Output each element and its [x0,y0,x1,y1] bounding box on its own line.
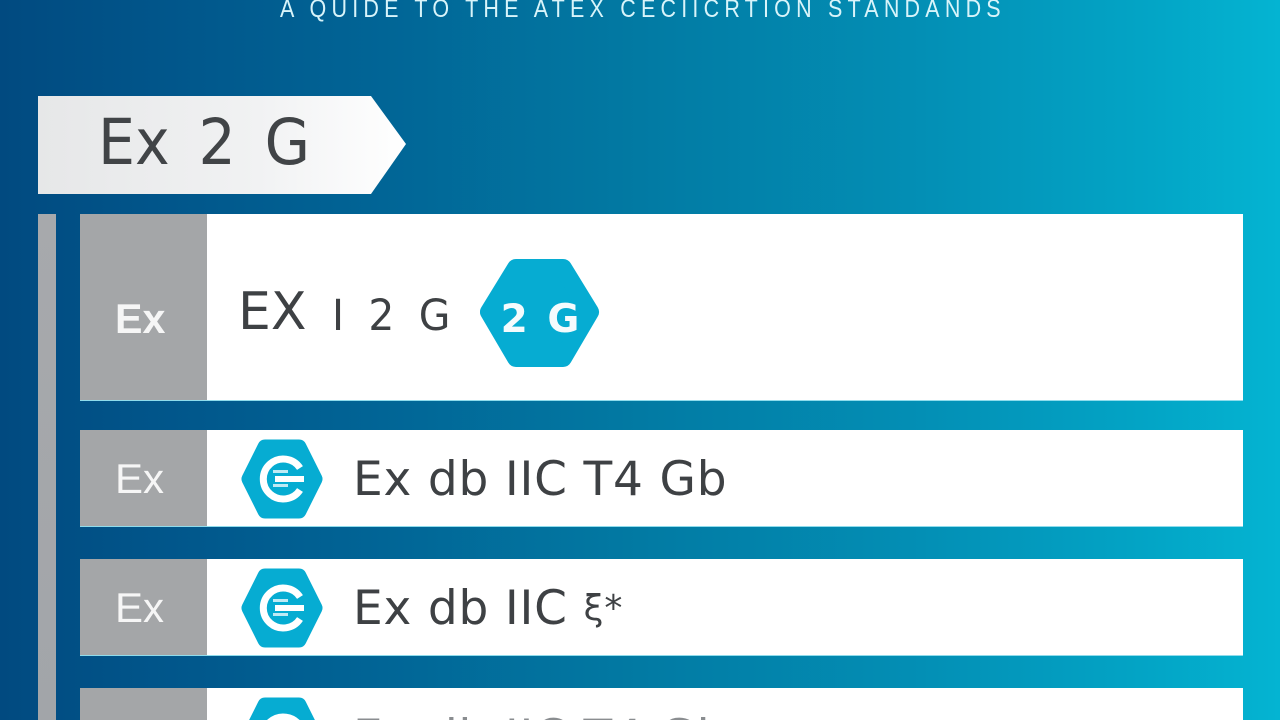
panel: row 2 [80,430,1243,526]
icon: hexagon emblem [241,568,322,648]
row 1 tab label: Ex [115,295,165,342]
vertical grey rail [38,214,56,720]
banner text: Ex 2 G [98,106,310,179]
panel: row 4 [80,688,1243,720]
row 1 text: EX [238,282,306,342]
row 2 tab label: Ex [115,455,164,502]
banner arrow shape [38,96,406,194]
row 2 grey tab [80,430,207,526]
row 4 grey tab [80,688,207,720]
heading banner: Ex 2 G [38,96,406,194]
row 3 grey tab [80,559,207,655]
icon: hexagon emblem [241,440,322,518]
icon: hexagon emblem [249,698,315,720]
icon: hexagon badge 2 G: 2 G [501,297,579,342]
panel: row 1 [80,214,1243,400]
row 1 text continuation: I 2 G [332,291,455,341]
panel: row 3 [80,559,1243,655]
row 1 grey tab [80,214,207,400]
icon: hexagon badge 2 G [480,259,600,367]
row 2 text: Ex db IIC T4 Gb [353,452,727,507]
row 3 tab label: Ex [115,584,164,631]
row 3 text: Ex db IIC ξ* [353,581,623,636]
